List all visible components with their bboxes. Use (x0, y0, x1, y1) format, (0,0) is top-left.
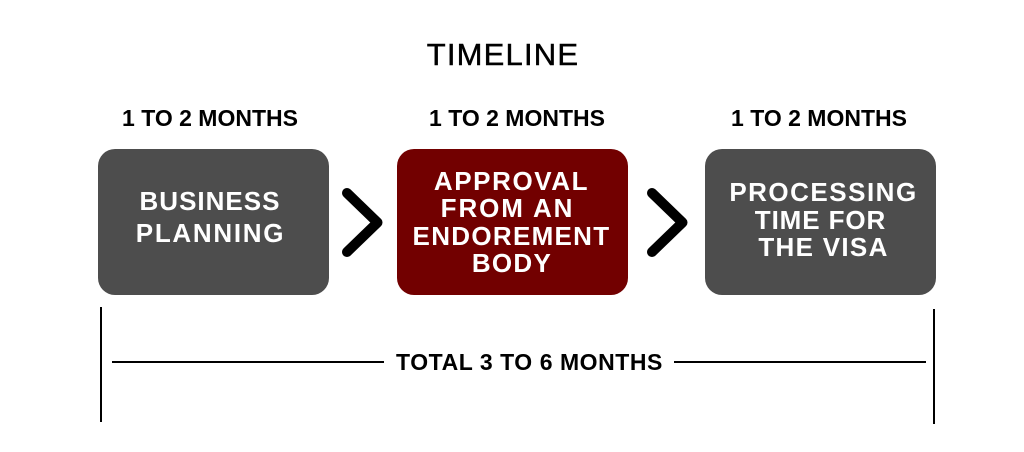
step box: processing time for the visa (705, 149, 936, 295)
step box: business planning: BUSINESS (140, 186, 280, 216)
total duration label: TOTAL 3 TO 6 MONTHS (396, 349, 663, 375)
step box: processing time for the visa: THE VISA (758, 232, 889, 262)
step box: business planning (98, 149, 329, 295)
duration label: business planning: 1 TO 2 MONTHS (122, 105, 298, 131)
step box: business planning: PLANNING (136, 218, 285, 248)
duration label: visa processing: 1 TO 2 MONTHS (731, 105, 907, 131)
step box: processing time for the visa: TIME FOR (755, 205, 886, 235)
arrow: step 1 to step 2 (342, 188, 382, 257)
step box: approval from an endorsement body: ENDOREMENT (413, 221, 610, 251)
step box: approval from an endorsement body: APPROVAL (434, 166, 589, 196)
arrow: step 2 to step 3 (647, 188, 688, 257)
step box: approval from an endorsement body (397, 149, 628, 295)
step box: approval from an endorsement body: BODY (472, 248, 552, 278)
title: TIMELINE (427, 37, 579, 72)
step box: approval from an endorsement body: FROM AN (441, 193, 574, 223)
step box: processing time for the visa: PROCESSING (729, 177, 918, 207)
duration label: endorsement approval: 1 TO 2 MONTHS (429, 105, 605, 131)
